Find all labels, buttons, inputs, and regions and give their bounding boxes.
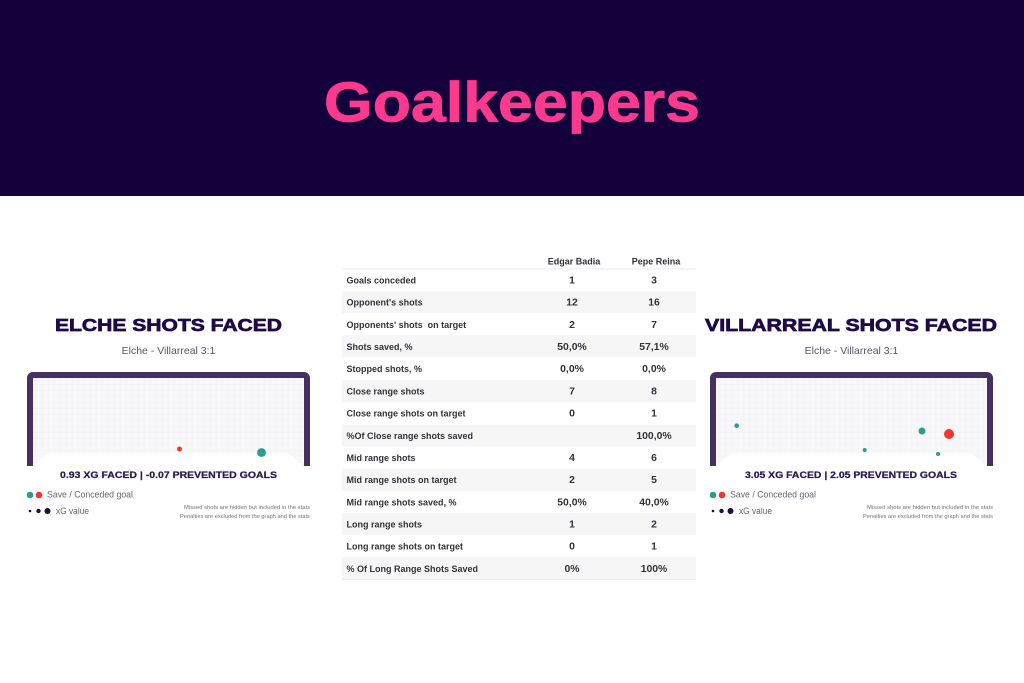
- row: mid range on target: 2: [569, 475, 575, 486]
- row: opponent's shots: 12: [566, 298, 578, 308]
- xG summary: 3.05 XG FACED | 2.05 PREVENTED GOALS: [745, 470, 957, 480]
- row: goals conceded: 1: [569, 276, 575, 286]
- panel heading: ELCHE SHOTS FACED: [55, 315, 282, 335]
- panel: Elche shots faced: [27, 315, 310, 520]
- legend: xG value: xG value: [56, 506, 89, 516]
- row: close range shots: 7: [569, 386, 575, 398]
- legend: xG value: [29, 506, 89, 516]
- shot: conceded goal: [944, 429, 954, 439]
- row: opponent's shots: 16: [648, 298, 660, 308]
- legend: save and conceded: Save / Conceded goal: [730, 490, 816, 500]
- footnote: [180, 505, 310, 520]
- row: long range on target: 1: [651, 542, 657, 552]
- title: Goalkeepers: [324, 70, 700, 134]
- row: mid range saved: [346, 498, 669, 508]
- row: long range shots: 1: [569, 520, 575, 530]
- panel heading: VILLARREAL SHOTS FACED: [705, 315, 997, 335]
- row: long range saved: 0%: [564, 564, 580, 575]
- row: mid range on target: Mid range shots on target: [346, 475, 457, 485]
- row: long range saved: % Of Long Range Shots Saved: [346, 564, 478, 574]
- row: close range on target: Close range shots on target: [346, 408, 466, 418]
- row: close range on target: 1: [651, 408, 657, 420]
- row: long range shots: Long range shots: [346, 520, 422, 530]
- row: stopped shots: 0,0%: [642, 364, 666, 375]
- table header: [548, 256, 681, 266]
- row: mid range shots: [346, 453, 657, 464]
- panel: Villarreal shots faced: [705, 315, 997, 520]
- footnote: Missed shots are hidden but included in the stats: [867, 505, 993, 511]
- row: mid range saved: Mid range shots saved, %: [346, 498, 457, 508]
- row: long range saved: 100%: [641, 564, 667, 575]
- row: mid range saved: 50,0%: [557, 498, 587, 508]
- panel: stats table: [342, 256, 696, 580]
- row: goals conceded: Goals conceded: [346, 276, 416, 286]
- row: mid range on target: 5: [651, 475, 657, 486]
- row: long range on target: [346, 542, 657, 552]
- legend: xG value: [712, 506, 772, 516]
- row: opponents' shots on target: 7: [651, 320, 657, 331]
- footnote: Penalties are excluded from the graph and the stats: [863, 514, 993, 520]
- xG summary: 0.93 XG FACED | -0.07 PREVENTED GOALS: [60, 470, 277, 480]
- legend: save and conceded: Save / Conceded goal: [47, 490, 133, 500]
- table header: Edgar Badia: [548, 256, 601, 266]
- row: close range shots: [346, 386, 657, 398]
- row: shots saved: [346, 342, 669, 353]
- shot: save: [257, 448, 266, 457]
- footnote: [863, 505, 993, 520]
- row: opponents' shots on target: Opponents' shots on target: [346, 320, 466, 330]
- row: long range on target: Long range shots on target: [346, 542, 463, 552]
- row: close range saved: 100,0%: [636, 431, 672, 442]
- row: mid range on target: [346, 475, 657, 486]
- row: shots saved: 50,0%: [557, 342, 587, 353]
- row: opponents' shots on target: 2: [569, 320, 575, 331]
- row: shots saved: 57,1%: [639, 342, 669, 353]
- row: goals conceded: 3: [651, 276, 657, 286]
- match subtitle: Elche - Villarreal 3:1: [122, 345, 216, 357]
- footnote: Penalties are excluded from the graph and the stats: [180, 514, 310, 520]
- match subtitle: Elche - Villarreal 3:1: [805, 345, 899, 357]
- row: long range shots: [346, 520, 657, 530]
- row shading: [342, 291, 696, 579]
- row: mid range saved: 40,0%: [639, 498, 669, 508]
- row: opponents' shots on target: [346, 320, 657, 331]
- row: close range saved: [346, 431, 672, 442]
- row: opponent's shots: Opponent's shots: [346, 298, 423, 308]
- header banner: [0, 0, 1024, 196]
- row: close range on target: [346, 408, 657, 420]
- row: shots saved: Shots saved, %: [346, 342, 413, 352]
- row: stopped shots: [346, 364, 666, 375]
- row: stopped shots: 0,0%: [560, 364, 584, 375]
- row: opponent's shots: [346, 298, 660, 308]
- row: stopped shots: Stopped shots, %: [346, 364, 422, 374]
- goal graphic: [27, 372, 310, 466]
- shot: conceded goal: [177, 446, 182, 452]
- footnote: Missed shots are hidden but included in the stats: [184, 505, 310, 511]
- row: goals conceded: [346, 276, 657, 286]
- legend: xG value: xG value: [739, 506, 772, 516]
- row: close range shots: 8: [651, 386, 657, 398]
- row: mid range shots: 6: [651, 453, 657, 464]
- row: long range saved: [346, 564, 667, 575]
- row: close range shots: Close range shots: [346, 386, 425, 396]
- table header: Pepe Reina: [632, 256, 681, 266]
- row: mid range shots: 4: [569, 453, 575, 464]
- row: close range saved: %Of Close range shots saved: [346, 431, 473, 441]
- row: long range on target: 0: [569, 542, 575, 552]
- row: long range shots: 2: [651, 520, 657, 530]
- goal graphic: [710, 372, 993, 466]
- row: close range on target: 0: [569, 408, 575, 420]
- row: mid range shots: Mid range shots: [346, 453, 416, 463]
- shots: saves: [734, 423, 940, 456]
